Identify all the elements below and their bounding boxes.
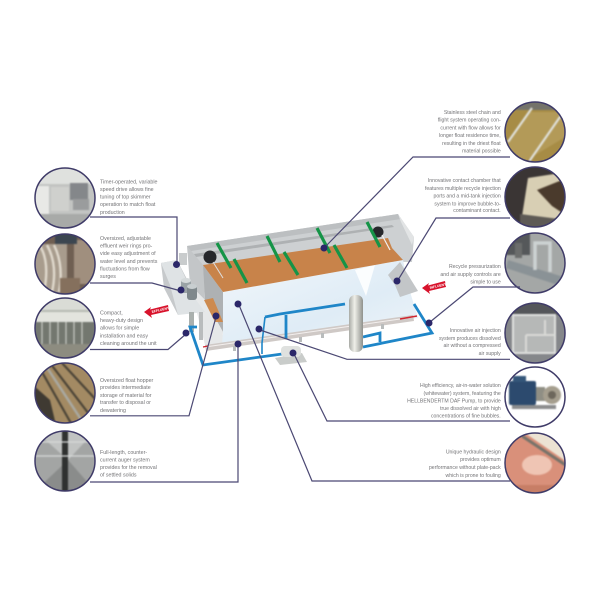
- text: installation and easy: [100, 333, 148, 339]
- ring: [505, 303, 565, 363]
- text: (whitewater) system, featuring the: [424, 391, 501, 397]
- dot: [394, 278, 400, 284]
- text: performance without plate-pack: [429, 465, 501, 471]
- text: true dissolved air with high: [440, 406, 501, 412]
- text: High efficiency, air-in-water solution: [420, 383, 501, 389]
- leader: [430, 287, 520, 322]
- text: current auger system: [100, 458, 150, 464]
- text: production: [100, 210, 125, 216]
- dot: [178, 286, 184, 294]
- ring: [505, 433, 565, 493]
- effluent box: [161, 253, 205, 340]
- photo: rings: [36, 234, 94, 294]
- ring: [505, 233, 565, 293]
- text: Innovative contact chamber that: [428, 178, 501, 184]
- dot: [320, 244, 328, 252]
- text: and air supply controls are: [440, 272, 501, 278]
- text: Recycle pressurization: [449, 264, 501, 270]
- photo: hydraulic: [506, 434, 564, 492]
- leader: [325, 157, 510, 247]
- dot: [234, 340, 242, 348]
- text: resulting in the driest float: [442, 141, 501, 147]
- text: Oversized, adjustable: [100, 236, 151, 242]
- dot: [234, 300, 242, 308]
- text: simple to use: [470, 280, 501, 286]
- text: Innovative air injection: [450, 328, 501, 334]
- photo: hopper: [36, 364, 94, 422]
- text: Stainless steel chain and: [444, 110, 501, 116]
- callout: float hopper: [33, 312, 220, 425]
- text: system produces dissolved: [439, 336, 501, 342]
- text: speed drive allows fine: [100, 187, 154, 193]
- text: fluctuations from flow: [100, 266, 150, 272]
- text: air supply: [479, 351, 501, 357]
- flights: green bars: [217, 222, 380, 283]
- text: effluent weir rings pro-: [100, 244, 153, 250]
- text: heavy-duty design: [100, 318, 143, 324]
- text: dewatering: [100, 408, 126, 414]
- label: effluent arrow: [144, 305, 170, 318]
- ring: [35, 298, 95, 358]
- text: [429, 450, 501, 479]
- text: Oversized float hopper: [100, 378, 154, 384]
- text: longer float residence time,: [439, 133, 501, 139]
- text: [100, 236, 158, 280]
- text: Unique hydraulic design: [446, 450, 501, 456]
- callout: air injection: [256, 301, 567, 365]
- ring: [505, 102, 565, 162]
- ring: [35, 168, 95, 228]
- blue pipework: [190, 304, 432, 365]
- dot: [426, 320, 432, 326]
- dot: [256, 326, 262, 332]
- float hopper: [204, 298, 223, 322]
- text: Compact,: [100, 310, 123, 316]
- text: Timer-operated, variable: [100, 180, 158, 186]
- diagram: flotation tank: [161, 214, 432, 365]
- leader: [239, 305, 510, 481]
- drive wheels: [204, 226, 390, 278]
- text: tuning of top skimmer: [100, 194, 151, 200]
- DAF pump: [275, 346, 307, 365]
- text: cleaning around the unit: [100, 341, 157, 347]
- text: [100, 310, 157, 347]
- text: transfer to disposal or: [100, 400, 151, 406]
- text: system to improve bubble-to-: [434, 201, 501, 207]
- text: [439, 328, 501, 357]
- text: which is prone to fouling: [446, 473, 501, 479]
- photo: flights: [506, 102, 564, 162]
- leader: [398, 218, 510, 280]
- dot: [290, 350, 296, 356]
- callout: effluent weir rings: [33, 232, 184, 296]
- auger trough: [203, 315, 417, 351]
- photo: pump: [508, 375, 562, 410]
- text: features multiple recycle injection: [425, 186, 501, 192]
- photo: chamber: [506, 168, 564, 226]
- leader: [90, 283, 181, 291]
- text: [440, 264, 501, 286]
- dot: [212, 312, 220, 320]
- photo: auger: [36, 432, 94, 490]
- callout: contact chamber: [394, 165, 567, 284]
- leader: [90, 344, 238, 482]
- inlet chamber: [388, 262, 418, 297]
- ring: [505, 367, 565, 427]
- text: air without a compressed: [444, 343, 501, 349]
- text: ports and a mid-tank injection: [434, 194, 501, 200]
- text: vide easy adjustment of: [100, 251, 156, 257]
- left wall: [187, 246, 223, 345]
- dot: [182, 330, 190, 336]
- white flow notch: [355, 265, 375, 296]
- callout: auger system: [33, 340, 242, 493]
- photo: plant: [36, 298, 94, 358]
- text: [100, 450, 157, 478]
- ring: [35, 431, 95, 491]
- tank body: [206, 260, 418, 349]
- text: current with flow allows for: [440, 125, 501, 131]
- leader: [90, 217, 177, 265]
- ring: [505, 167, 565, 227]
- photo: frame: [506, 304, 564, 362]
- text: flight system operating con-: [438, 118, 501, 124]
- text: concentrations of fine bubbles.: [431, 414, 501, 420]
- text: [425, 178, 501, 214]
- text: contaminant contact.: [453, 208, 501, 214]
- ring: [35, 363, 95, 423]
- float layer: [203, 238, 403, 292]
- text: operation to match float: [100, 202, 156, 208]
- text: material possible: [462, 148, 501, 154]
- callout: recycle pressurization: [426, 231, 567, 326]
- callout: variable speed drive: [33, 166, 180, 268]
- ring: [35, 234, 95, 294]
- text: provides optimum: [460, 457, 501, 463]
- text: Full-length, counter-: [100, 450, 147, 456]
- text: [100, 180, 158, 216]
- text: provides intermediate: [100, 385, 151, 391]
- text: surges: [100, 274, 116, 280]
- text: of settled solids: [100, 472, 137, 478]
- photo: piping: [506, 234, 564, 292]
- text: provides for the removal: [100, 465, 157, 471]
- leader: [260, 330, 510, 359]
- label: influent arrow: [422, 281, 447, 294]
- leader: [90, 334, 186, 350]
- text: water level and prevents: [100, 259, 158, 265]
- text: [100, 378, 154, 414]
- text: [438, 110, 501, 154]
- callout: hydraulic design: [234, 300, 567, 495]
- back wall and rim: [187, 214, 414, 290]
- text: allows for simple: [100, 326, 139, 332]
- label: influent arrow: INFLUENT: [429, 282, 447, 290]
- text: HELLBENDERTM DAF Pump, to provide: [407, 398, 501, 404]
- leader: [90, 317, 216, 416]
- label: effluent arrow: EFFLUENT: [151, 306, 170, 314]
- callout: DAF pump: [290, 350, 567, 429]
- air saturation vessel: [349, 295, 363, 352]
- dot: [173, 261, 180, 268]
- callout: chain and flight: [320, 100, 567, 252]
- text: storage of material for: [100, 393, 152, 399]
- photo: drive: [36, 168, 94, 228]
- leader: [294, 354, 510, 421]
- callout: compact design: [33, 296, 190, 360]
- text: [407, 383, 501, 420]
